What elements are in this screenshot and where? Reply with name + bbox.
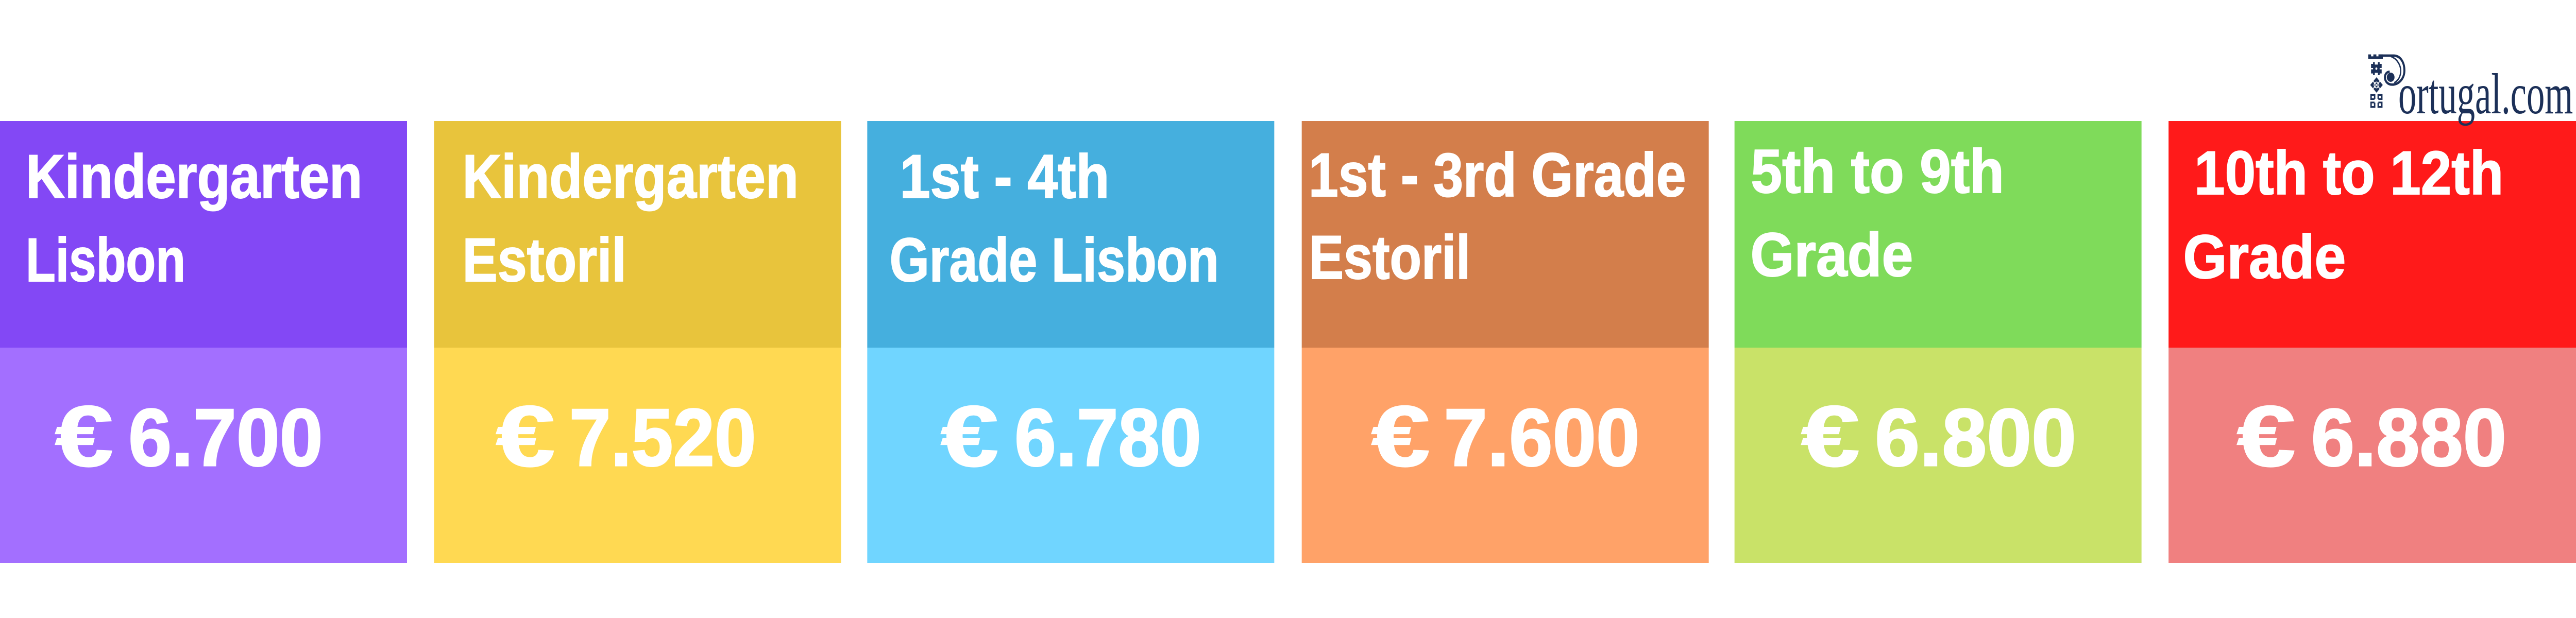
header block: 10th to 12th Grade: 10th to 12th	[2194, 139, 2503, 208]
header block: Kindergarten Estoril	[434, 121, 841, 348]
icon: ornamental letter P	[2368, 55, 2404, 108]
price block: 6.880 euro: €	[2237, 388, 2296, 485]
panel: Kindergarten Lisbon	[0, 121, 407, 563]
header block: Kindergarten Estoril: Estoril	[463, 226, 626, 295]
panel: 1st - 3rd Grade Estoril	[1302, 121, 1709, 563]
price block: 6.700 euro: €	[55, 388, 113, 485]
panel: Kindergarten Estoril	[434, 121, 841, 563]
price block: 7.520 euro: 7.520	[569, 392, 756, 483]
header block: Kindergarten Lisbon	[0, 121, 407, 348]
price block: 7.600 euro: €	[1371, 388, 1430, 485]
price block: 6.780 euro	[867, 348, 1274, 563]
header block: 5th to 9th Grade: Grade	[1751, 220, 1913, 289]
price block: 6.880 euro: 6.880	[2311, 392, 2506, 483]
header block: 1st - 3rd Grade Estoril: 1st - 3rd Grade	[1309, 141, 1686, 210]
price block: 6.800 euro	[1735, 348, 2142, 563]
header block: Kindergarten Lisbon: Kindergarten	[26, 142, 362, 211]
header block: 1st - 3rd Grade Estoril	[1302, 121, 1709, 348]
header block: 10th to 12th Grade: Grade	[2183, 222, 2346, 291]
header block: 1st - 4th Grade Lisbon	[867, 121, 1274, 348]
price block: 6.700 euro: 6.700	[128, 392, 323, 483]
header block: Kindergarten Lisbon: Lisbon	[26, 226, 185, 295]
header block: 10th to 12th Grade	[2168, 121, 2576, 348]
price block: 6.780 euro: €	[941, 388, 998, 485]
price block: 7.600 euro	[1302, 348, 1709, 563]
header block: 5th to 9th Grade: 5th to 9th	[1751, 137, 2004, 206]
logo: Portugal.com	[2368, 55, 2573, 126]
header block: 5th to 9th Grade	[1735, 121, 2142, 348]
panel: 10th to 12th Grade	[2168, 121, 2576, 563]
price block: 6.780 euro: 6.780	[1014, 392, 1201, 483]
panel: 5th to 9th Grade	[1735, 121, 2142, 563]
price block: 7.520 euro: €	[496, 388, 555, 485]
price block: 7.520 euro	[434, 348, 841, 563]
price block: 6.880 euro	[2168, 348, 2576, 563]
header block: Kindergarten Estoril: Kindergarten	[463, 142, 799, 211]
panel: 1st - 4th Grade Lisbon	[867, 121, 1274, 563]
price block: 6.700 euro	[0, 348, 407, 563]
header block: 1st - 3rd Grade Estoril: Estoril	[1309, 223, 1470, 292]
price block: 7.600 euro: 7.600	[1444, 392, 1639, 483]
price block: 6.800 euro: €	[1801, 388, 1860, 485]
header block: 1st - 4th Grade Lisbon: 1st - 4th	[900, 142, 1109, 211]
header block: 1st - 4th Grade Lisbon: Grade Lisbon	[890, 226, 1219, 295]
price block: 6.800 euro: 6.800	[1875, 392, 2076, 483]
